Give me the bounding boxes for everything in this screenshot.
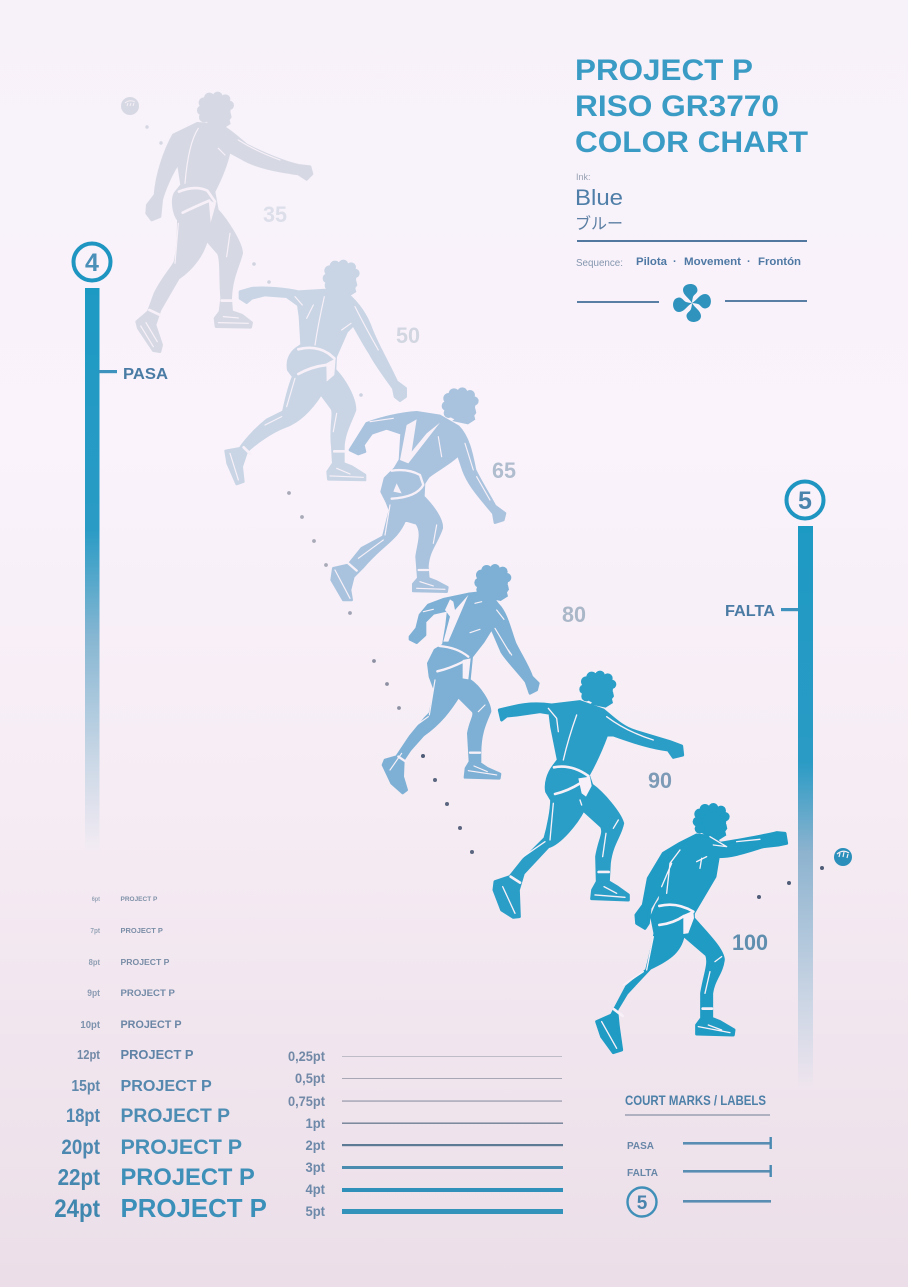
type size chart: 18pt	[66, 1106, 101, 1127]
tint percentages: 90	[648, 768, 672, 793]
tint percentages: 100	[732, 930, 768, 955]
label: FALTA: FALTA	[725, 603, 775, 620]
type size chart: 7pt	[90, 928, 101, 935]
line weight chart: 3pt	[306, 1159, 325, 1175]
line weight chart: 0,5pt	[295, 1070, 325, 1086]
line weight chart	[288, 1048, 563, 1219]
figure: 65 percent	[332, 387, 505, 600]
legend: court marks / labels: FALTA	[627, 1167, 658, 1179]
title: COLOR CHART	[575, 126, 808, 159]
trajectory dots and balls	[121, 97, 852, 899]
ink name block: Blue	[575, 185, 623, 210]
type size chart: 9pt	[87, 988, 101, 999]
figure: 90 percent	[494, 671, 683, 917]
sequence line: Frontón	[758, 256, 801, 268]
label: PASA: PASA	[123, 366, 168, 383]
type size chart: PROJECT P	[120, 1106, 230, 1127]
figure: 80 percent	[383, 564, 538, 793]
type size chart: PROJECT P	[120, 988, 175, 999]
sequence line: Sequence:	[576, 257, 623, 269]
type size chart: 6pt	[92, 897, 100, 903]
circle badge 5	[786, 482, 824, 518]
type size chart: PROJECT P	[120, 1135, 242, 1159]
type size chart: PROJECT P	[120, 1165, 255, 1191]
divider with lauburu icon	[577, 284, 807, 322]
tint percentages: 80	[562, 602, 586, 627]
type size chart: PROJECT P	[120, 957, 170, 967]
tint percentages: 35	[263, 202, 287, 227]
legend: court marks / labels	[625, 1092, 772, 1216]
type size chart: 22pt	[58, 1164, 100, 1190]
title: PROJECT P	[575, 54, 753, 87]
type size chart: PROJECT P	[120, 1077, 212, 1095]
line weight chart: 2pt	[306, 1137, 325, 1153]
line weight chart: 0,75pt	[288, 1093, 325, 1109]
type size chart: 24pt	[54, 1195, 101, 1223]
type size chart: PROJECT P	[120, 926, 163, 935]
ball: end	[834, 848, 852, 866]
line weight chart: 4pt	[306, 1181, 325, 1197]
figure: 35 percent	[137, 92, 312, 352]
rod 5 with FALTA mark	[725, 482, 824, 1088]
line weight chart: 0,25pt	[288, 1048, 325, 1064]
type size chart: 20pt	[61, 1136, 100, 1159]
icon: lauburu	[673, 284, 711, 322]
sequence line: ·	[673, 256, 677, 268]
sequence line: ·	[747, 256, 751, 268]
tint percentages: 50	[396, 323, 420, 348]
type size chart: PROJECT P	[120, 896, 158, 903]
type size chart: 12pt	[77, 1047, 101, 1062]
ink name block	[575, 172, 623, 233]
sequence line: Pilota	[636, 256, 668, 268]
ink name block: ブルー	[575, 214, 623, 233]
type size chart: 10pt	[80, 1019, 100, 1031]
legend: court marks / labels: 5	[637, 1193, 648, 1214]
tint percentages	[263, 202, 768, 955]
legend: court marks / labels: PASA	[627, 1140, 654, 1152]
legend: court marks / labels: COURT MARKS / LABELS	[625, 1092, 766, 1108]
type size chart: PROJECT P	[120, 1047, 194, 1062]
tint percentages: 65	[492, 458, 516, 483]
figure: 50 percent	[226, 260, 406, 484]
rod 4 with PASA mark	[74, 244, 168, 850]
type size chart: PROJECT P	[120, 1019, 182, 1031]
title: RISO GR3770	[575, 90, 779, 123]
line weight chart: 1pt	[306, 1115, 325, 1131]
sequence line	[576, 256, 801, 269]
type size chart: 8pt	[89, 957, 100, 967]
sequence line: Movement	[684, 256, 741, 268]
circle badge 4: 4	[85, 249, 99, 277]
title	[575, 54, 808, 159]
type size chart: 15pt	[71, 1078, 101, 1095]
circle badge 5: 5	[798, 487, 812, 515]
ball: start	[121, 97, 139, 115]
line weight chart: 5pt	[306, 1203, 325, 1219]
ink name block: Ink:	[576, 172, 591, 182]
type size chart	[54, 896, 267, 1223]
circle badge 4	[74, 244, 110, 280]
type size chart: PROJECT P	[120, 1195, 267, 1223]
figure: 100 percent	[597, 803, 787, 1053]
